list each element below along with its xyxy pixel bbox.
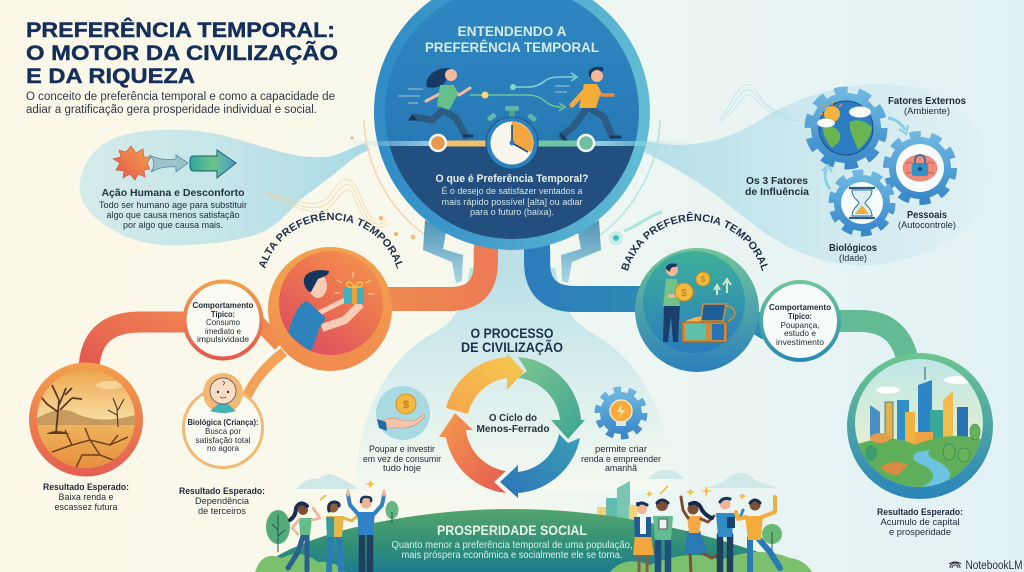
icon: bulb gear <box>598 390 644 436</box>
text: poupar: em vez de consumir <box>363 454 441 465</box>
arc yellow <box>446 353 524 414</box>
circle ring <box>635 248 759 372</box>
arrows between runners <box>398 73 577 111</box>
labels: Fatores Externos <box>888 96 966 107</box>
description: mais próspera econômica e socialmente ele se torna. <box>402 549 622 561</box>
arc blue <box>500 434 580 498</box>
heading: ENTENDENDO A <box>458 24 567 39</box>
arc red <box>439 413 506 493</box>
title <box>26 18 338 88</box>
panel: process arch <box>356 268 672 490</box>
text block: definition: para o futuro (baixa). <box>470 207 554 217</box>
panel: main circle <box>345 0 693 250</box>
title: PREFERÊNCIA TEMPORAL: <box>26 18 335 42</box>
card: comportamento alta: Comportamento <box>192 300 254 310</box>
text block: definition: mais rápido possível [alta] ou adiar <box>442 197 582 207</box>
icon: man with chest: $ <box>681 288 687 299</box>
card: comportamento baixa: investimento <box>776 337 824 347</box>
circle ring <box>268 247 392 371</box>
gear: biologicos <box>832 173 892 233</box>
bushes <box>255 552 812 572</box>
circle inner <box>643 251 745 353</box>
text block: definition: É o desejo de satisfazer ventados a <box>442 186 582 196</box>
title: E DA RIQUEZA <box>26 65 195 88</box>
description <box>392 539 632 561</box>
text: permite <box>581 444 661 474</box>
figures right <box>633 497 780 572</box>
text: poupar: Poupar e investir <box>369 444 435 455</box>
text: permite: permite criar <box>595 444 647 455</box>
arrow: link to comportamento <box>258 322 280 345</box>
card: comportamento alta: imediato e <box>205 326 241 336</box>
icon: stopwatch <box>486 106 538 169</box>
labels: Pessoais <box>907 210 947 221</box>
text: result desert: Baixa renda e <box>58 492 114 503</box>
buildings <box>597 481 637 528</box>
decorative dots <box>350 136 662 245</box>
icon: saving hand: $ <box>403 399 409 411</box>
clouds <box>296 470 778 489</box>
panel: os 3 fatores <box>745 91 966 264</box>
arrow: to city <box>835 321 908 362</box>
cycle label <box>476 412 550 435</box>
card: comportamento baixa: estudo e <box>784 328 816 338</box>
text: result city: Resultado Esperado: <box>877 507 963 518</box>
panel: alta preferencia <box>78 211 402 398</box>
card: biologica: Busca por <box>205 426 241 436</box>
panel: prosperidade social <box>255 470 812 572</box>
circle lower half <box>390 146 634 239</box>
icon: transition arrow <box>149 155 188 172</box>
text: result dependencia: Resultado Esperado: <box>179 486 265 497</box>
text: permite: renda e empreender <box>581 454 661 465</box>
card: biologica <box>184 373 262 468</box>
card: comportamento alta: Típico: <box>211 309 235 319</box>
panel: desert result <box>29 362 143 476</box>
decorative waves <box>265 84 800 235</box>
sparkles <box>320 480 747 500</box>
icon: green arrow <box>190 150 236 178</box>
man tablet <box>716 498 743 572</box>
text: permite: amanhã <box>605 463 638 474</box>
panel: left teal blob <box>80 130 370 245</box>
woman jumping <box>681 497 722 572</box>
hill <box>255 509 812 572</box>
figure: man running <box>560 67 620 140</box>
chart: cycle <box>439 353 585 498</box>
description: Quanto menor a preferência temporal de uma população, <box>392 539 632 551</box>
icon: baby <box>203 373 243 413</box>
text: result city: e prosperidade <box>889 527 951 538</box>
circle ring <box>374 0 650 250</box>
text block: definition: O que é Preferência Temporal? <box>436 173 589 185</box>
icon: discomfort burst <box>113 146 151 180</box>
description: Todo ser humano age para substituir <box>99 200 247 210</box>
arrow: link to biologica <box>247 352 284 396</box>
arrow branch: baixa <box>537 232 650 299</box>
circle inner <box>279 251 383 355</box>
card: comportamento alta: impulsividade <box>197 334 249 344</box>
icon: man with chest <box>663 264 735 342</box>
text: poupar <box>363 444 441 474</box>
card: comportamento alta <box>184 282 262 358</box>
circle upper half <box>385 0 639 146</box>
text: result city <box>877 507 963 538</box>
cycle label: Menos-Ferrado <box>476 423 550 435</box>
panel: acao humana <box>99 146 247 230</box>
subtitle: O conceito de preferência temporal e como a capacidade de <box>26 91 335 103</box>
cycle label: O Ciclo do <box>489 412 537 424</box>
card: comportamento baixa: Típico: <box>788 311 812 321</box>
labels: de Influência <box>745 186 809 198</box>
arc green <box>518 357 585 439</box>
arrow branch: alta <box>378 232 486 299</box>
panel: city result <box>847 353 993 499</box>
heading: processo: O PROCESSO <box>470 325 554 341</box>
gear: pessoais <box>886 134 954 202</box>
subtitle: adiar a gratificação gera prosperidade individual e social. <box>26 104 317 116</box>
card: comportamento alta: Consumo <box>206 317 240 327</box>
man arms raised <box>348 491 384 572</box>
person teal yellow <box>326 502 356 570</box>
arrow: link to comportamento <box>748 318 768 330</box>
man green <box>653 499 673 572</box>
labels: (Autocontrole) <box>898 220 956 231</box>
text block: definition <box>436 173 589 217</box>
heading: Ação Humana e Desconforto <box>102 187 244 199</box>
card: comportamento baixa: Poupança, <box>780 320 820 330</box>
card: biologica: Biológica (Criança): <box>188 417 259 427</box>
labels <box>745 96 966 264</box>
icon: person with gift <box>288 270 374 352</box>
figure: woman running <box>409 68 472 136</box>
curved label: ALTA PREFERÊNCIA TEMPORAL <box>259 211 402 269</box>
description: algo que causa menos satisfação <box>106 210 240 220</box>
arrow: alta to desert <box>89 322 190 370</box>
figures left <box>288 491 384 572</box>
card: comportamento baixa <box>761 282 839 360</box>
panel: baixa preferencia <box>621 212 918 372</box>
icon: saving hand <box>376 386 430 440</box>
heading: PREFERÊNCIA TEMPORAL <box>425 40 599 55</box>
card: comportamento baixa: Comportamento <box>769 302 831 312</box>
panel: right teal blob <box>640 84 992 266</box>
heading: processo <box>461 325 563 355</box>
timeline <box>345 135 693 151</box>
connector: legs under the main circle <box>423 220 601 283</box>
curved label: BAIXA PREFERÊNCIA TEMPORAL <box>621 212 768 272</box>
trees <box>266 501 782 560</box>
text: result desert: Resultado Esperado: <box>43 482 129 493</box>
heading <box>425 24 599 55</box>
text: result desert <box>43 482 129 513</box>
text: result dependencia <box>179 486 265 517</box>
gear: externos <box>809 91 883 165</box>
text: result desert: escassez futura <box>54 502 118 513</box>
woman blazer <box>633 502 654 572</box>
woman green <box>288 503 320 570</box>
description: por algo que causa mais. <box>123 220 223 230</box>
description <box>99 200 247 230</box>
icon: man with chest: $ <box>701 275 706 284</box>
labels: Biológicos <box>829 243 877 254</box>
text: poupar: tudo hoje <box>383 463 421 474</box>
arrows <box>822 118 908 189</box>
labels: (Ambiente) <box>904 106 950 117</box>
text: result dependencia: de terceiros <box>198 506 246 517</box>
labels: (Idade) <box>839 253 867 264</box>
subtitle <box>26 91 335 116</box>
labels: Os 3 Fatores <box>746 175 808 187</box>
man yellow <box>736 497 780 572</box>
card: biologica: no agora <box>207 443 239 453</box>
card: biologica: satisfação total <box>196 435 251 445</box>
heading: processo: DE CIVILIZAÇÃO <box>461 338 563 355</box>
heading: PROSPERIDADE SOCIAL <box>437 522 587 538</box>
title: O MOTOR DA CIVILIZAÇÃO <box>26 42 338 65</box>
text: result city: Acumulo de capital <box>880 517 960 528</box>
text: result dependencia: Dependência <box>195 496 250 507</box>
